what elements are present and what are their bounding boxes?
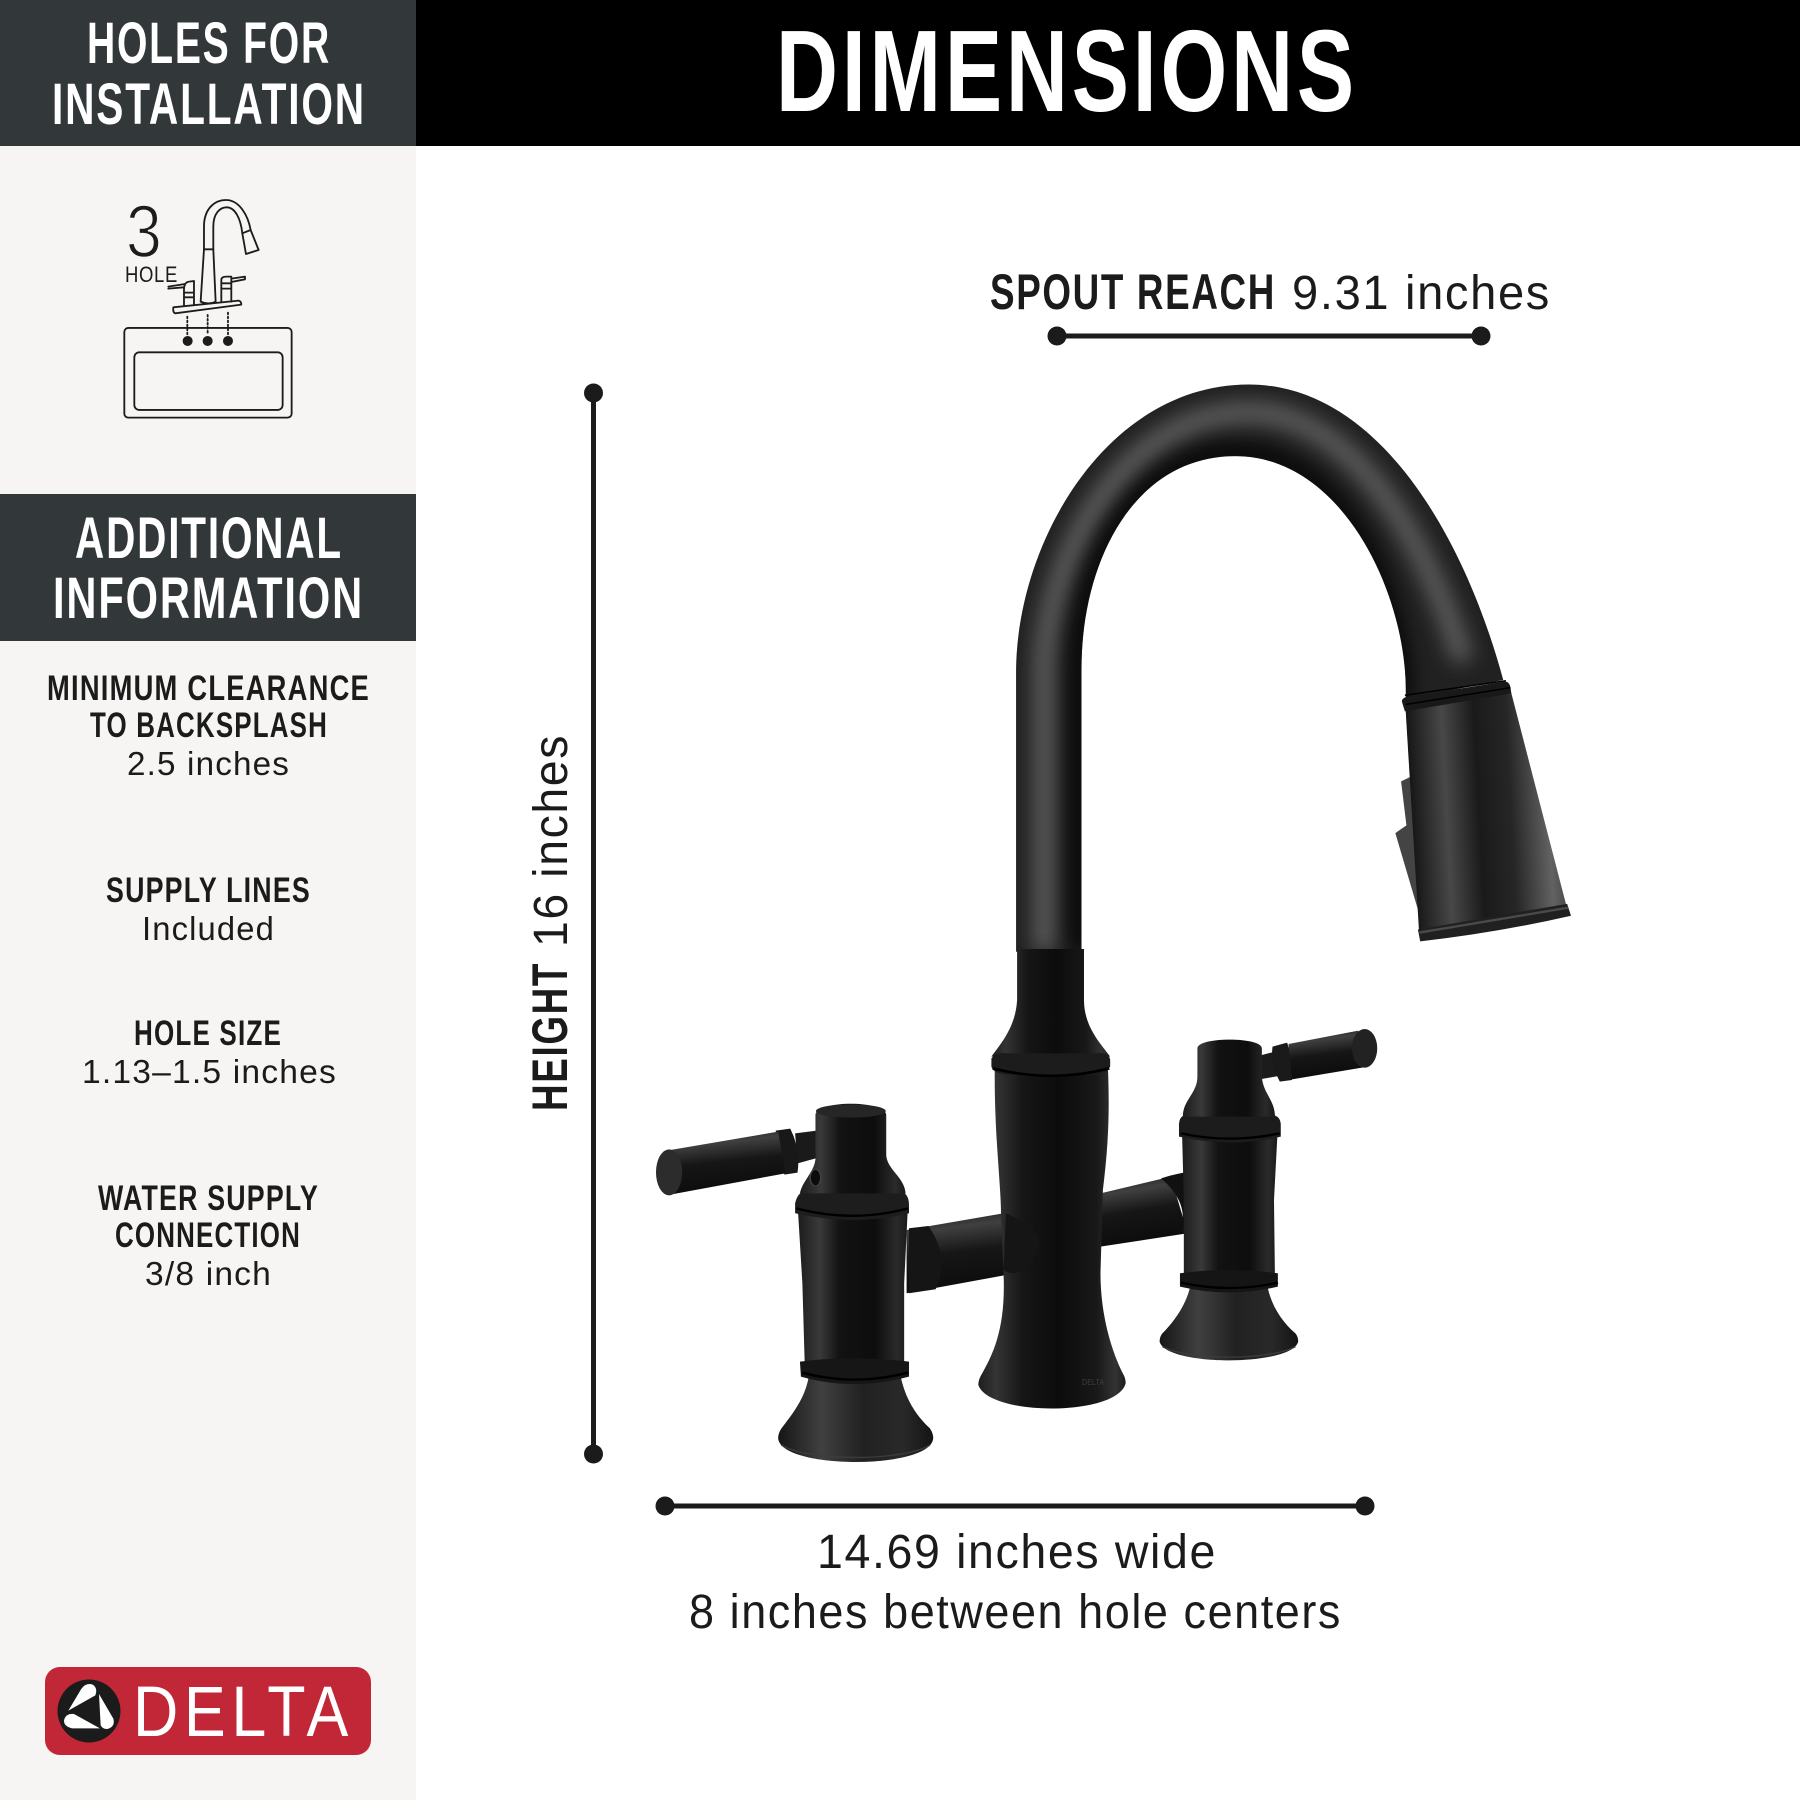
- text block: water supply connection: CONNECTION: [115, 1216, 301, 1255]
- text block: supply lines: [106, 871, 311, 947]
- text block: water supply connection: 3/8 inch: [145, 1255, 272, 1292]
- text block: water supply connection: [98, 1179, 319, 1292]
- left connector arm: [907, 1212, 1040, 1293]
- center pillar: [978, 949, 1126, 1409]
- faucet product image: [656, 385, 1571, 1462]
- heading: holes for installation: INSTALLATION: [52, 72, 366, 137]
- heading: holes for installation: HOLES FOR: [87, 11, 331, 76]
- logo: Delta: DELTA: [133, 1673, 354, 1752]
- heading: additional information: INFORMATION: [53, 566, 364, 631]
- height dimension: 16 inches: [525, 734, 578, 947]
- text block: minimum clearance: MINIMUM CLEARANCE: [47, 669, 370, 708]
- text block: supply lines: Included: [142, 910, 275, 947]
- center pillar: DELTA: [1082, 1378, 1105, 1387]
- text block: hole size: [82, 1014, 337, 1090]
- title bar: dimensions: DIMENSIONS: [776, 6, 1358, 136]
- spout reach dimension: [990, 264, 1551, 346]
- left handle: [656, 1129, 834, 1195]
- right connector arm: [1100, 1177, 1188, 1247]
- width dimension: 14.69 inches wide: [817, 1526, 1217, 1579]
- right handle: [1256, 1029, 1377, 1082]
- height dimension: [522, 384, 603, 1464]
- text block: supply lines: SUPPLY LINES: [106, 871, 311, 910]
- logo: Delta: [45, 1667, 371, 1755]
- icon: three-hole faucet and sink: 3: [126, 190, 164, 273]
- width dimension: [656, 1496, 1374, 1639]
- heading: additional information: ADDITIONAL: [75, 506, 343, 571]
- height dimension: HEIGHT: [522, 962, 578, 1111]
- left column: [778, 1104, 933, 1462]
- icon: three-hole faucet and sink: HOLE: [125, 262, 178, 287]
- text block: minimum clearance: TO BACKSPLASH: [90, 706, 328, 745]
- text block: minimum clearance: [47, 669, 370, 782]
- heading: holes for installation: [0, 0, 416, 146]
- spout and spray head: [1016, 385, 1571, 952]
- text block: water supply connection: WATER SUPPLY: [98, 1179, 319, 1218]
- panel: sidebar: [0, 0, 416, 1800]
- text block: hole size: 1.13–1.5 inches: [82, 1053, 337, 1090]
- spout reach dimension: 9.31 inches: [1292, 267, 1551, 320]
- faucet body and handles: [656, 949, 1377, 1462]
- title bar: dimensions: [416, 0, 1800, 146]
- text block: hole size: HOLE SIZE: [134, 1014, 282, 1053]
- heading: additional information: [0, 494, 416, 641]
- text block: minimum clearance: 2.5 inches: [127, 745, 290, 782]
- right column: [1160, 1040, 1298, 1360]
- width dimension: 8 inches between hole centers: [689, 1586, 1342, 1639]
- spout reach dimension: SPOUT REACH: [990, 264, 1276, 320]
- icon: three-hole faucet and sink: [124, 190, 292, 418]
